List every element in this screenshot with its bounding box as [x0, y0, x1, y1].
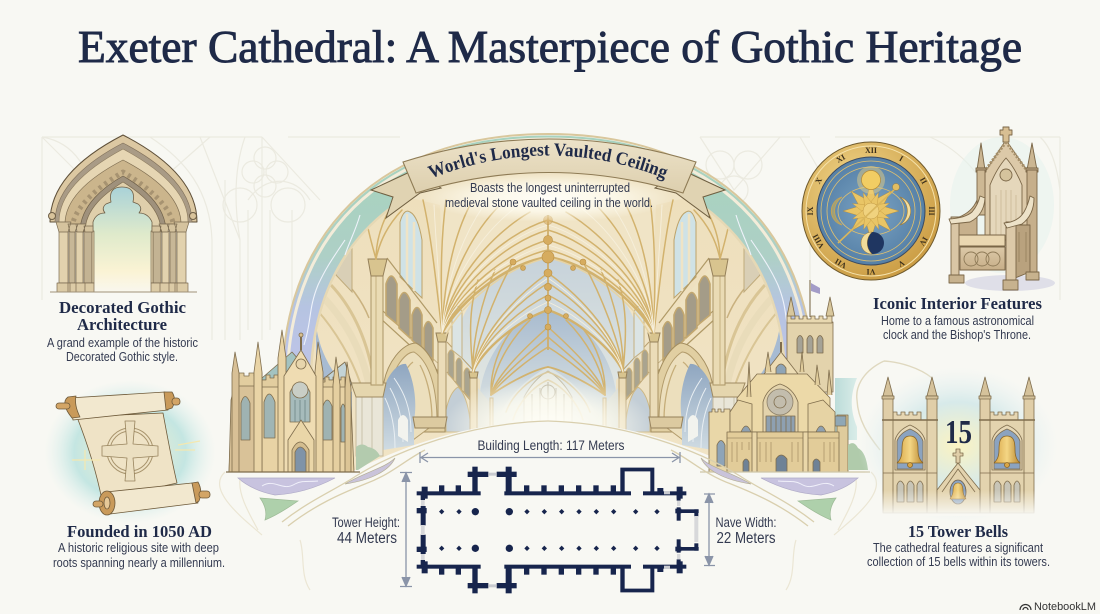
- heading: Architecture: [77, 315, 167, 334]
- nave half: [313, 190, 493, 480]
- label: nave width: Nave Width:: [716, 515, 776, 530]
- label: building length: Building Length: 117 Meters: [478, 437, 624, 453]
- faint frame curves: [220, 472, 310, 590]
- left aisle: [316, 325, 352, 445]
- side bay wall: [445, 342, 480, 432]
- panel: founded in 1050 AD: [44, 380, 225, 570]
- icon: bell towers: [858, 367, 1058, 523]
- dome edge curves: [282, 421, 548, 526]
- icon: gothic arch: [48, 135, 197, 292]
- clock numerals: VIII: [811, 232, 826, 250]
- description: [881, 314, 1034, 342]
- bell: [897, 436, 923, 463]
- clock numerals: II: [918, 176, 929, 186]
- clock numerals: VI: [867, 267, 875, 276]
- heading: Founded in 1050 AD: [67, 522, 212, 541]
- column drum: [356, 396, 383, 456]
- clock numerals: X: [813, 176, 824, 186]
- clock numerals: IX: [806, 206, 815, 215]
- floor plan: [417, 467, 699, 593]
- frame curl right: [857, 361, 932, 450]
- background tracery: [42, 137, 1060, 340]
- description: [867, 541, 1050, 569]
- tall windows: [400, 211, 422, 298]
- rib fans half: [366, 200, 548, 420]
- clock sun star: [831, 171, 911, 251]
- clock numerals: XI: [835, 152, 847, 165]
- panel: iconic interior features: [802, 127, 1055, 342]
- green panel: [260, 498, 298, 520]
- description: A grand example of the historic: [47, 336, 198, 350]
- ceiling description: [445, 181, 653, 210]
- description: roots spanning nearly a millennium.: [53, 556, 225, 570]
- heading: [59, 298, 186, 334]
- ceiling bay 3 with end window: [518, 368, 578, 390]
- clock numerals: I: [898, 154, 905, 163]
- description: The cathedral features a significant: [873, 541, 1043, 555]
- illustration: right cathedral exterior: [700, 280, 870, 472]
- clock numerals: III: [927, 206, 936, 216]
- label: nave width: [716, 515, 776, 547]
- clock moons: [900, 197, 911, 225]
- lavender leaf: [345, 458, 395, 484]
- clock numerals: IV: [917, 235, 930, 248]
- description: clock and the Bishop's Throne.: [883, 328, 1031, 342]
- lower ornaments half: [220, 421, 548, 590]
- label: nave width: 22 Meters: [716, 530, 776, 547]
- heading: 15 Tower Bells: [908, 522, 1008, 541]
- panel: 15 tower bells: [858, 367, 1058, 569]
- number 15: 15: [945, 414, 972, 451]
- lavender panel: [238, 478, 335, 495]
- main columns: [371, 275, 383, 385]
- label: tower height: [332, 515, 400, 547]
- description: Decorated Gothic style.: [66, 350, 178, 364]
- icon: scroll: [44, 380, 216, 524]
- description: [53, 541, 225, 570]
- description: Home to a famous astronomical: [881, 314, 1034, 328]
- clock numerals: [806, 146, 936, 276]
- ceiling bay 1: [456, 260, 640, 390]
- panel: decorated gothic architecture: [47, 135, 198, 364]
- ceiling description: Boasts the longest uninterrupted: [470, 181, 630, 195]
- aisle arch: [383, 343, 445, 432]
- arch band frame: [282, 134, 814, 400]
- clock numerals: XII: [865, 146, 877, 155]
- bush right: [848, 443, 868, 470]
- vaulted nave interior: [312, 173, 781, 470]
- panel: world's longest vaulted ceiling: [284, 133, 808, 470]
- ribbon banner: [370, 138, 726, 220]
- lower dome panel: [200, 421, 900, 614]
- icon: bishop's throne: [949, 127, 1055, 291]
- illustration: left cathedral exterior: [226, 330, 360, 472]
- title: Exeter Cathedral: A Masterpiece of Gothic Heritage: [78, 21, 1022, 72]
- ceiling bay 2: [480, 312, 616, 401]
- triforium arcade: [380, 258, 438, 371]
- description: collection of 15 bells within its towers.: [867, 555, 1050, 569]
- arrow: nave width: [704, 494, 715, 566]
- arrow: tower height: [400, 472, 412, 586]
- ceiling bosses: [510, 215, 586, 350]
- heading: Decorated Gothic: [59, 298, 186, 317]
- bush left: [356, 444, 380, 470]
- description: [47, 336, 198, 364]
- clock top sun: [857, 166, 885, 194]
- clock numerals: V: [896, 258, 906, 269]
- panel: floor plan with dimensions: [332, 437, 776, 593]
- ceiling description: medieval stone vaulted ceiling in the world.: [445, 196, 653, 210]
- description: A historic religious site with deep: [58, 541, 219, 555]
- light glow: [448, 379, 648, 432]
- banner title: World's Longest Vaulted Ceiling: [427, 143, 668, 182]
- upper wall: [354, 199, 740, 248]
- arrow: building length: [420, 452, 680, 463]
- clock numerals: VII: [833, 256, 848, 270]
- heading: Iconic Interior Features: [873, 294, 1042, 313]
- label: tower height: 44 Meters: [337, 530, 397, 547]
- watermark: NotebookLM: NotebookLM: [1034, 601, 1096, 613]
- label: tower height: Tower Height:: [332, 515, 400, 530]
- icon: astronomical clock: [802, 142, 940, 280]
